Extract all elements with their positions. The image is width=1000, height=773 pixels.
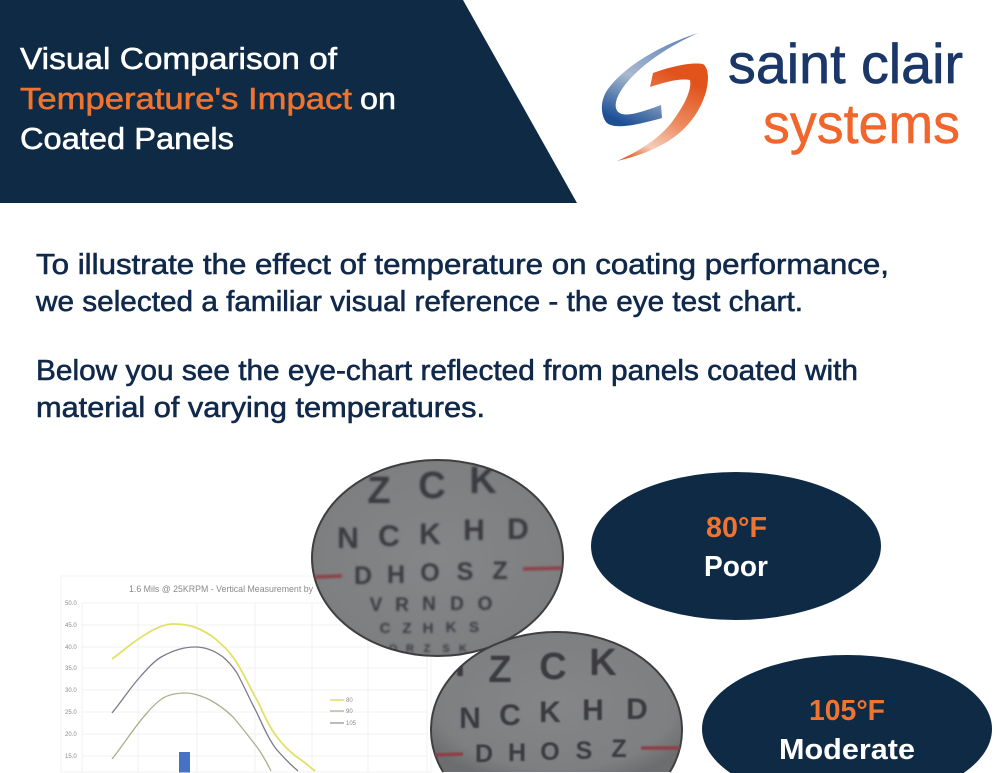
eye chart reflection: 105F panel: K xyxy=(539,696,561,729)
line chart xyxy=(61,576,431,772)
eye chart reflection: 80F panel: Z xyxy=(367,470,391,512)
intro text: we selected a familiar visual reference - the eye test chart. xyxy=(35,286,803,318)
eye chart reflection: 105F panel: D xyxy=(626,693,648,726)
eye chart reflection: 105F panel: C xyxy=(499,699,521,732)
y axis labels: 30.0 xyxy=(65,688,77,694)
curve: 80 xyxy=(112,624,315,771)
eye chart reflection: 80F panel: Z xyxy=(492,557,508,585)
eye chart reflection: 80F panel: R xyxy=(406,643,414,655)
eye chart reflection: 105F panel xyxy=(431,632,682,772)
eye chart reflection: 105F panel: H xyxy=(508,739,526,767)
eye chart reflection: 80F panel: H xyxy=(463,514,485,547)
y axis labels xyxy=(65,601,77,760)
y axis labels: 45.0 xyxy=(65,623,77,629)
chart title: 1.6 Mils @ 25KRPM - Vertical Measurement by xyxy=(129,584,313,595)
legend: 90 xyxy=(346,709,353,715)
logo: saint clair systems: systems xyxy=(763,92,960,155)
y axis labels: 40.0 xyxy=(65,645,77,651)
callout: 80F poor: Poor xyxy=(704,551,768,583)
eye chart reflection: 80F panel: C xyxy=(378,520,400,553)
eye chart reflection: 105F panel: O xyxy=(540,738,560,766)
eye chart reflection: 80F panel: V xyxy=(370,595,383,616)
logo wordmark: saint clair xyxy=(728,32,963,95)
legend xyxy=(330,698,357,727)
eye chart reflection: 80F panel: S xyxy=(442,643,450,655)
y axis labels: 50.0 xyxy=(65,601,77,607)
eye chart reflection: 105F panel: H xyxy=(582,694,604,727)
eye chart reflection: 105F panel: I xyxy=(455,643,465,685)
eye chart reflection: 80F panel: O xyxy=(389,643,398,655)
eye chart reflection: 105F panel: C xyxy=(539,646,567,688)
eye chart reflection: 105F panel: N xyxy=(459,702,481,735)
eye chart reflection: 80F panel: S xyxy=(469,619,479,636)
intro text: Below you see the eye-chart reflected from panels coated with xyxy=(36,355,858,387)
y axis labels: 25.0 xyxy=(65,710,77,716)
title: Visual Comparison of xyxy=(20,41,337,76)
eye chart reflection: 80F panel: D xyxy=(354,562,372,590)
eye chart reflection: 80F panel: H xyxy=(387,561,405,589)
eye chart reflection: 105F panel: S xyxy=(576,737,592,765)
legend: 80 xyxy=(346,698,353,704)
eye chart reflection: 80F panel: N xyxy=(422,594,436,615)
eye chart reflection: 105F panel: Z xyxy=(611,735,627,763)
title: on xyxy=(360,81,396,116)
eye chart reflection: 80F panel xyxy=(312,460,563,656)
callout: 80F poor xyxy=(591,472,881,620)
y axis labels: 35.0 xyxy=(65,666,77,672)
eye chart reflection: 80F panel: C xyxy=(418,465,446,507)
eye chart reflection: 80F panel: R xyxy=(395,595,409,616)
logo: saint clair systems xyxy=(602,32,963,161)
callout: 105F moderate xyxy=(702,655,992,773)
icon: blue swoosh xyxy=(602,33,698,126)
eye chart reflection: 80F panel: S xyxy=(457,558,473,586)
y axis labels: 15.0 xyxy=(65,754,77,760)
title: Temperature's Impact xyxy=(20,81,352,116)
eye chart reflection: 80F panel: N xyxy=(337,522,359,555)
header banner xyxy=(0,0,577,203)
callout: 105F moderate: 105°F xyxy=(809,695,885,727)
icon: orange swoosh xyxy=(617,63,708,161)
intro text: To illustrate the effect of temperature on coating performance, xyxy=(36,249,889,281)
eye chart reflection: 105F panel: Z xyxy=(488,649,512,691)
eye chart reflection: 80F panel: Z xyxy=(424,643,431,655)
intro text: material of varying temperatures. xyxy=(36,392,485,424)
eye chart reflection: 80F panel: D xyxy=(507,513,529,546)
bar xyxy=(179,752,190,772)
eye chart reflection: 80F panel: I xyxy=(332,463,342,505)
eye chart reflection: 80F panel: K xyxy=(419,518,441,551)
eye chart reflection: 80F panel: Z xyxy=(402,620,412,637)
legend: 105 xyxy=(346,721,357,727)
title: Coated Panels xyxy=(20,121,234,156)
intro text xyxy=(35,249,889,424)
callout: 105F moderate: Moderate xyxy=(779,734,915,766)
eye chart reflection: 80F panel: K xyxy=(446,619,457,636)
curve: 90 xyxy=(112,693,271,771)
eye chart reflection: 80F panel: K xyxy=(469,460,497,502)
eye chart reflection: 80F panel: D xyxy=(450,594,464,615)
y axis labels: 20.0 xyxy=(65,732,77,738)
eye chart reflection: 80F panel: O xyxy=(478,594,492,615)
eye chart reflection: 80F panel: H xyxy=(423,620,433,637)
curve: 105 xyxy=(112,647,298,771)
eye chart reflection: 80F panel: O xyxy=(420,559,440,587)
eye chart reflection: 105F panel: K xyxy=(589,642,617,684)
eye chart reflection: 80F panel: C xyxy=(380,620,391,637)
title xyxy=(20,41,396,156)
eye chart reflection: 80F panel: K xyxy=(459,643,467,655)
callout: 80F poor: 80°F xyxy=(706,512,767,544)
eye chart reflection: 105F panel: D xyxy=(475,740,493,768)
